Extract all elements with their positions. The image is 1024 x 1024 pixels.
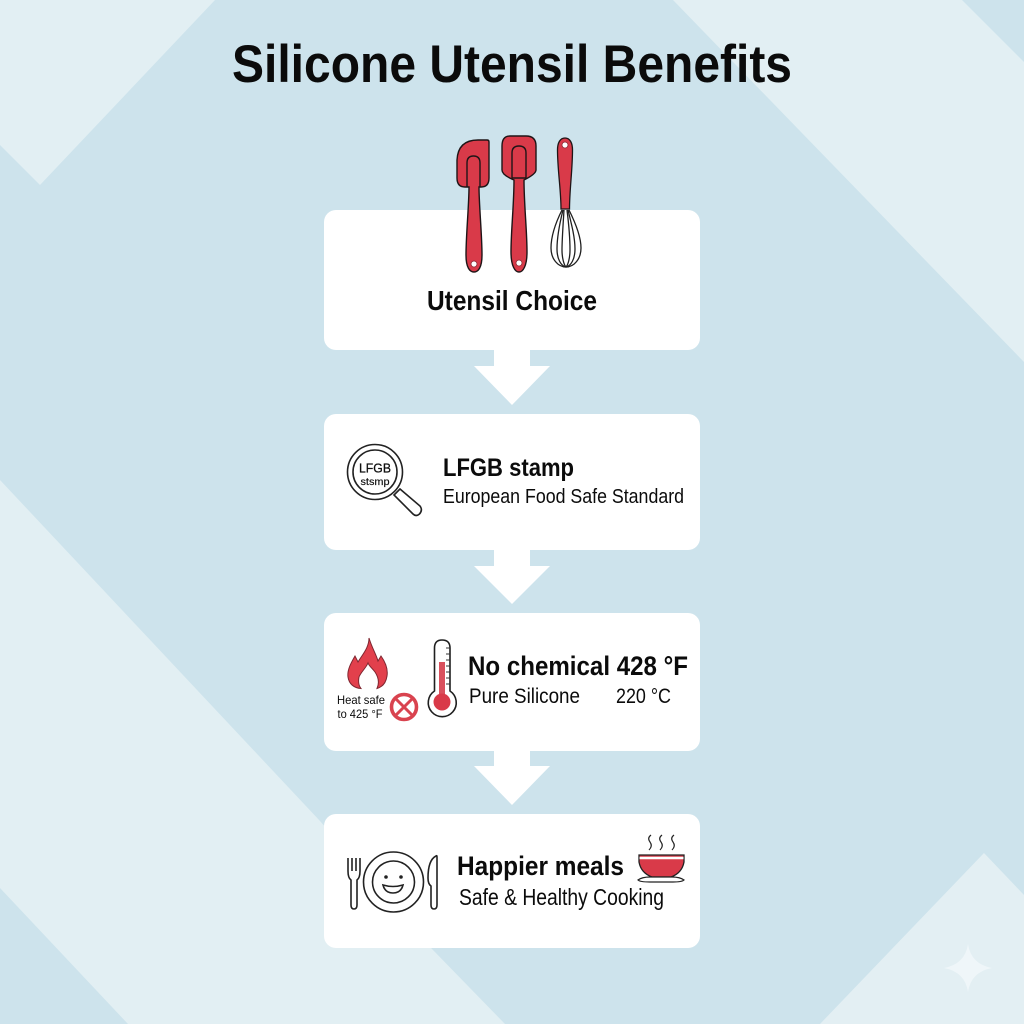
icon: magnifier stamp: stsmp [360, 476, 390, 488]
text: safe and healthy cooking: Safe & Healthy Cooking [459, 884, 664, 910]
panel: utensil choice [324, 136, 700, 350]
heading: LFGB stamp: LFGB stamp [443, 454, 574, 482]
text: heat safe: to 425 °F [338, 707, 382, 721]
text: european standard: European Food Safe Standard [443, 485, 684, 508]
icon: whisk [551, 138, 581, 267]
icon: spatula one [457, 140, 489, 272]
heading: no chemical 428 F: No chemical 428 °F [468, 651, 688, 681]
icon: sparkle [944, 944, 992, 992]
icon: magnifier stamp [348, 444, 421, 516]
arrow: step 1 to 2 [474, 350, 550, 405]
panel: happier meals [324, 814, 700, 948]
text: pure silicone: Pure Silicone [469, 685, 580, 708]
arrow: step 3 to 4 [474, 748, 550, 805]
text: heat safe [337, 693, 385, 721]
heading: happier meals: Happier meals [457, 851, 624, 881]
arrow: step 2 to 3 [474, 550, 550, 604]
icon: smiling plate [364, 852, 424, 912]
icon: thermometer [428, 640, 456, 717]
icon: flame [348, 638, 387, 688]
icon: fork [348, 858, 360, 909]
panel: LFGB stamp [324, 414, 700, 550]
icon: steaming bowl [638, 835, 684, 882]
icon: knife [428, 856, 437, 909]
icon: spatula two [502, 136, 536, 272]
icon: magnifier stamp: LFGB [359, 460, 391, 476]
icon: crossed circle [392, 694, 416, 720]
title: Silicone Utensil Benefits [232, 35, 792, 94]
text: heat safe: Heat safe [337, 693, 385, 707]
heading: utensil choice: Utensil Choice [427, 285, 597, 316]
panel: no chemical [324, 613, 700, 751]
text: 220 C: 220 °C [616, 685, 671, 708]
